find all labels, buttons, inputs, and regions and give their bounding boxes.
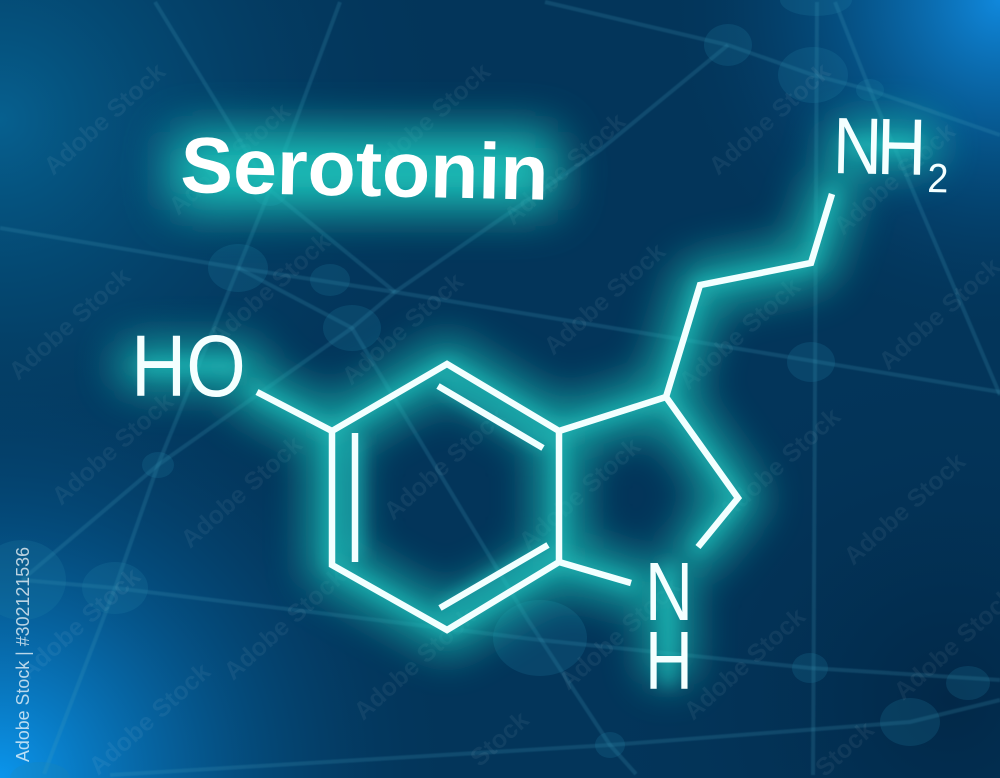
watermarks: Adobe Stock <box>714 402 846 526</box>
side credit text: Adobe Stock | #302121536 <box>13 547 33 762</box>
watermarks: Adobe Stock <box>47 387 179 511</box>
watermarks: Adobe Stock <box>14 562 146 686</box>
watermarks: Adobe Stock <box>4 262 136 386</box>
ring double bonds <box>355 386 548 608</box>
watermarks: Adobe Stock <box>349 602 481 726</box>
title glow <box>170 132 558 210</box>
watermarks: Adobe Stock <box>204 227 336 351</box>
label: HO: HO <box>131 318 246 415</box>
label: NH: N <box>645 545 693 638</box>
watermarks: Adobe Stock <box>337 267 469 391</box>
label: NH2: 2 <box>927 156 949 202</box>
label: NH: H <box>645 614 693 707</box>
label: NH2: NH <box>832 101 927 192</box>
watermarks: Adobe Stock <box>84 657 216 778</box>
watermarks: Adobe Stock <box>164 97 296 221</box>
benzene ring <box>332 364 559 630</box>
watermarks: Adobe Stock <box>674 272 806 396</box>
watermarks: Adobe Stock <box>679 602 811 726</box>
molecule near glow <box>145 145 915 680</box>
watermarks: Adobe Stock <box>364 57 496 181</box>
molecule wide glow <box>140 145 915 660</box>
watermarks: Stock <box>465 706 534 772</box>
watermarks: Adobe Stock <box>839 447 971 571</box>
molecule structure <box>257 194 832 630</box>
ethylamine chain <box>666 194 832 397</box>
watermarks: Adobe Stock <box>219 562 351 686</box>
ring to NH bond <box>559 562 631 583</box>
watermarks: Adobe Stock <box>539 237 671 361</box>
hydroxyl bond <box>257 392 332 431</box>
watermarks: Adobe Stock <box>704 57 836 181</box>
label: NH <box>645 545 693 707</box>
watermarks: Adobe Stock <box>514 432 646 556</box>
watermarks: Adobe Stock <box>499 107 631 231</box>
watermarks: Adobe Stock <box>554 572 686 696</box>
watermarks: Adobe Stock <box>829 117 961 241</box>
watermarks: Adobe Stock <box>39 57 171 181</box>
watermarks: Adobe Stock <box>379 402 511 526</box>
watermarks: Adobe Stock <box>176 430 308 554</box>
title: Serotonin <box>180 120 549 217</box>
pyrrole ring <box>559 397 738 547</box>
